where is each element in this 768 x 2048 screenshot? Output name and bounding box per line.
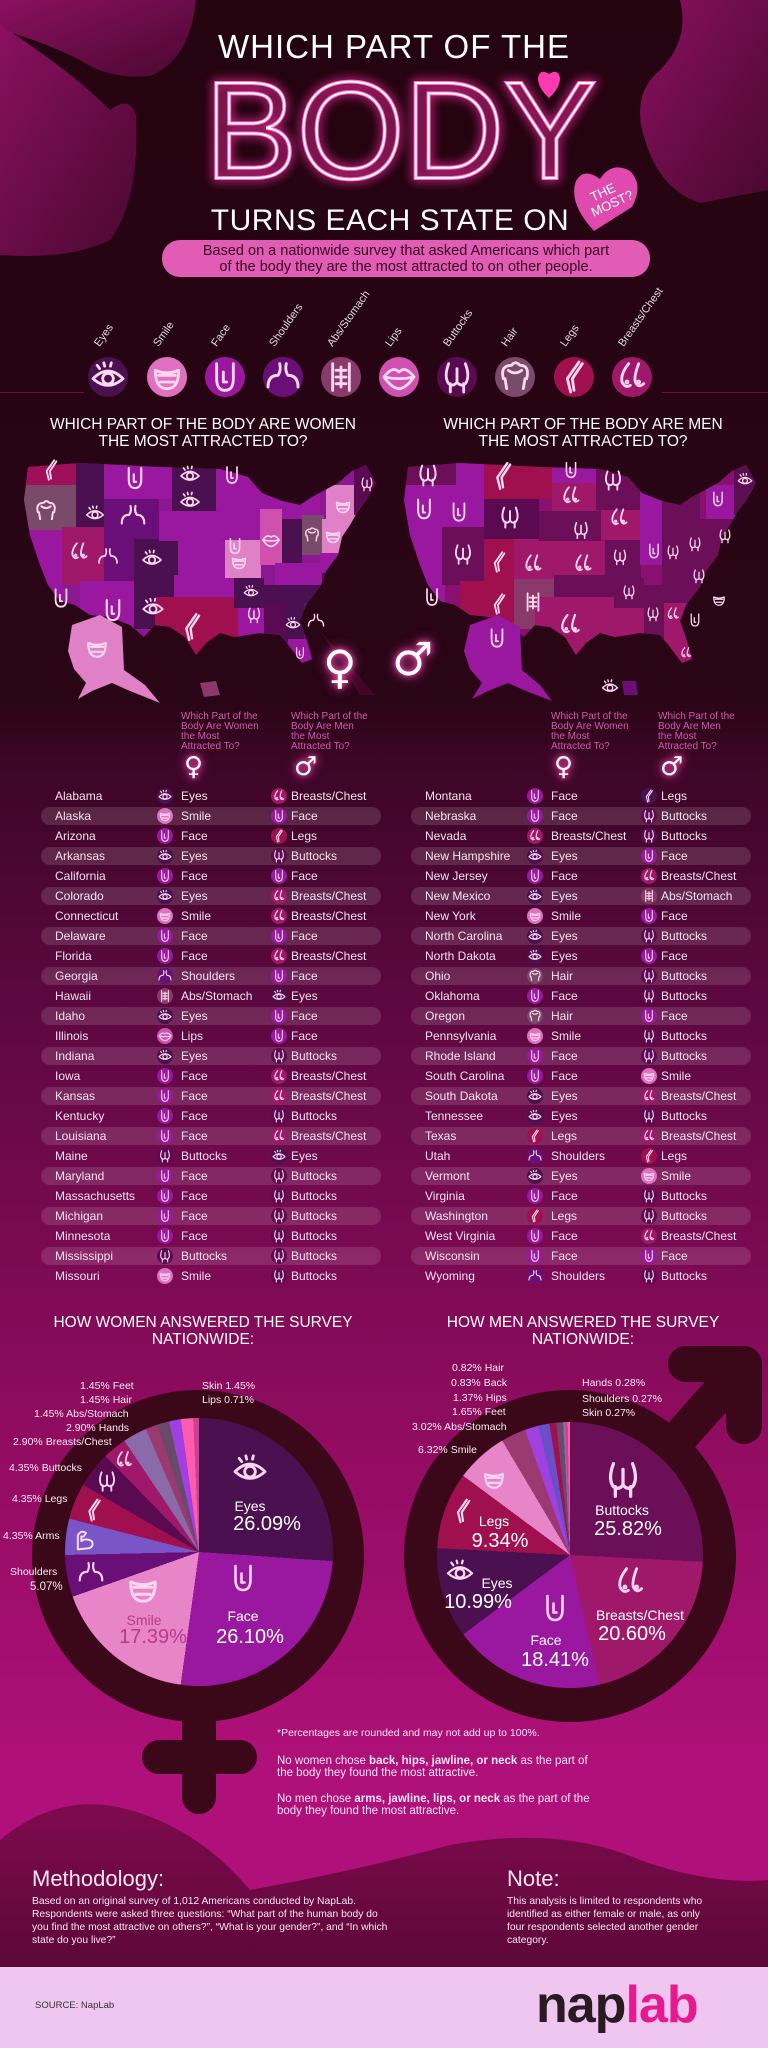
- female pie chart: [32, 1390, 364, 1814]
- table: states A-M: Face: [291, 869, 318, 883]
- table: states A-M: Face: [181, 949, 208, 963]
- table: states M-W: Utah: [425, 1149, 450, 1163]
- footnotes: *Percentages are rounded and may not add up to 100%.: [277, 1727, 540, 1739]
- symbol: female: ♀: [323, 640, 357, 694]
- table: states A-M: Eyes: [181, 789, 208, 803]
- table: states A-M: Kentucky: [55, 1109, 104, 1123]
- table: states A-M: Face: [181, 929, 208, 943]
- footnotes: the body they found the most attractive.: [277, 1767, 478, 1779]
- table: states M-W: Buttocks: [661, 1269, 707, 1283]
- table: states A-M: Eyes: [181, 1049, 208, 1063]
- table: states M-W: Buttocks: [661, 1049, 707, 1063]
- table: states M-W: Legs: [551, 1209, 577, 1223]
- female pie labels: [3, 1380, 255, 1593]
- legend: buttocks: [437, 308, 477, 397]
- table: states M-W: Vermont: [425, 1169, 470, 1183]
- table: states A-M: Eyes: [291, 989, 318, 1003]
- table: states A-M: Abs/Stomach: [181, 989, 252, 1003]
- legend: hair: Hair: [499, 326, 521, 349]
- female pie chart: Face: [227, 1608, 259, 1624]
- table: states M-W: Face: [551, 1049, 578, 1063]
- table: states A-M: Delaware: [55, 929, 106, 943]
- table: states A-M: Breasts/Chest: [291, 1089, 366, 1103]
- table: states M-W: Hair: [551, 969, 573, 983]
- table: states A-M: Face: [291, 929, 318, 943]
- table: states M-W: Face: [551, 809, 578, 823]
- table: states A-M: Minnesota: [55, 1229, 110, 1243]
- legend: breasts: [612, 286, 666, 397]
- table: states M-W: Face: [551, 869, 578, 883]
- legend: lips: Lips: [383, 326, 405, 349]
- table: states M-W: Oregon: [425, 1009, 465, 1023]
- female pie labels: 4.35% Arms: [3, 1530, 60, 1542]
- table: states A-M: Buttocks: [291, 1109, 337, 1123]
- male pie chart: 9.34%: [472, 1530, 528, 1552]
- female pie labels: Skin 1.45%: [202, 1380, 255, 1392]
- table: states A-M: Breasts/Chest: [291, 789, 366, 803]
- male pie labels: 1.37% Hips: [453, 1392, 507, 1404]
- heart: the most: THE: [588, 180, 618, 204]
- table: states A-M: Connecticut: [55, 909, 118, 923]
- pie icons: [446, 1462, 644, 1622]
- table: states M-W: New York: [425, 909, 476, 923]
- table: states M-W: Buttocks: [661, 1109, 707, 1123]
- table: states A-M: Eyes: [181, 1009, 208, 1023]
- table: states A-M: Iowa: [55, 1069, 80, 1083]
- table: states A-M: Michigan: [55, 1209, 103, 1223]
- female pie chart: 26.10%: [216, 1626, 284, 1648]
- table: states A-M: Face: [181, 1189, 208, 1203]
- table headers: Which Part of the: [181, 711, 258, 722]
- table: states M-W: Face: [661, 949, 688, 963]
- heading: women pie: NATIONWIDE:: [152, 1331, 254, 1348]
- table headers: Body Are Men: [658, 721, 721, 732]
- male pie chart: Legs: [479, 1513, 509, 1529]
- subtitle pill: [162, 240, 650, 277]
- table: states M-W: South Carolina: [425, 1069, 504, 1083]
- table headers: Attracted To?: [291, 741, 350, 752]
- methodology: Methodology:: [32, 1866, 164, 1891]
- table: states M-W: Eyes: [551, 1089, 578, 1103]
- male pie chart: Face: [530, 1632, 562, 1648]
- table: states A-M: Florida: [55, 949, 92, 963]
- table: states M-W: Smile: [661, 1169, 691, 1183]
- map: men: [404, 462, 756, 701]
- legend: abs: Abs/Stomach: [325, 289, 373, 349]
- legend: smile: [147, 320, 187, 397]
- table: states M-W: Face: [551, 1249, 578, 1263]
- table: states M-W: New Hampshire: [425, 849, 510, 863]
- table headers: the Most: [658, 731, 696, 742]
- table: states A-M: Buttocks: [291, 1209, 337, 1223]
- female pie chart: 26.09%: [233, 1513, 301, 1535]
- male symbol ring and arrow: [668, 1346, 762, 1447]
- legend: hair: [495, 326, 535, 397]
- table headers: ♂: [294, 752, 317, 782]
- table: states M-W: Rhode Island: [425, 1049, 496, 1063]
- male pie labels: [412, 1362, 662, 1456]
- table: states A-M: Eyes: [181, 849, 208, 863]
- note: This analysis is limited to respondents who: [507, 1896, 702, 1907]
- legend: shoulders: Shoulders: [267, 302, 305, 349]
- table: states M-W: New Mexico: [425, 889, 490, 903]
- legend: buttocks: Buttocks: [441, 308, 475, 349]
- legend: smile: Smile: [151, 320, 177, 349]
- table: states A-M: Eyes: [291, 1149, 318, 1163]
- note: category.: [507, 1935, 549, 1946]
- table headers: Which Part of the: [658, 711, 735, 722]
- table: states M-W: Eyes: [551, 929, 578, 943]
- table: states A-M: Breasts/Chest: [291, 949, 366, 963]
- table: states M-W: Buttocks: [661, 969, 707, 983]
- table: states A-M: Breasts/Chest: [291, 1069, 366, 1083]
- table: states A-M: Illinois: [55, 1029, 88, 1043]
- subtitle pill: of the body they are the most attracted to on other people.: [219, 259, 593, 275]
- table: states M-W: Buttocks: [661, 829, 707, 843]
- table: states M-W: Shoulders: [551, 1149, 605, 1163]
- table: states A-M: Missouri: [55, 1269, 100, 1283]
- heading: women map: [50, 416, 356, 450]
- table headers: the Most: [291, 731, 329, 742]
- table: states M-W: Legs: [661, 1149, 687, 1163]
- table: states A-M: Breasts/Chest: [291, 1129, 366, 1143]
- heading: men map: THE MOST ATTRACTED TO?: [478, 433, 688, 450]
- map icons: women: [37, 460, 372, 658]
- table: states M-W: Face: [661, 849, 688, 863]
- table: states A-M: Face: [181, 1069, 208, 1083]
- pie icons: [76, 1451, 266, 1603]
- source: SOURCE: NapLab: [35, 2000, 114, 2011]
- table: states M-W: Montana: [425, 789, 472, 803]
- table: states A-M: Buttocks: [291, 1269, 337, 1283]
- table: states A-M: Georgia: [55, 969, 98, 983]
- table: states A-M: Face: [181, 1089, 208, 1103]
- table: states A-M: Mississippi: [55, 1249, 113, 1263]
- table: states M-W: Legs: [551, 1129, 577, 1143]
- footnotes: [277, 1727, 590, 1817]
- legend: legs: [554, 323, 594, 397]
- table: states A-M: Buttocks: [181, 1149, 227, 1163]
- table: states A-M: Kansas: [55, 1089, 95, 1103]
- table: states M-W: Face: [661, 1009, 688, 1023]
- table headers: Body Are Women: [181, 721, 259, 732]
- table: states M-W: Smile: [661, 1069, 691, 1083]
- table headers: the Most: [181, 731, 219, 742]
- title: TURNS EACH STATE ON: [211, 204, 569, 237]
- table headers: ♀: [554, 752, 573, 782]
- table: states M-W: Abs/Stomach: [661, 889, 732, 903]
- table: states A-M: Buttocks: [291, 1229, 337, 1243]
- male pie chart: 20.60%: [598, 1623, 666, 1645]
- table: states A-M: Indiana: [55, 1049, 94, 1063]
- table: states A-M: Buttocks: [291, 1049, 337, 1063]
- table: states A-M: Face: [291, 969, 318, 983]
- note: [507, 1866, 702, 1946]
- footer: [0, 1967, 768, 2048]
- table: states M-W: West Virginia: [425, 1229, 495, 1243]
- table: states A-M: Maine: [55, 1149, 88, 1163]
- table: states A-M: [41, 788, 381, 1284]
- table: states M-W: Legs: [661, 789, 687, 803]
- table: states M-W: Buttocks: [661, 1209, 707, 1223]
- female pie chart: 17.39%: [119, 1626, 187, 1648]
- legend: shoulders: [263, 302, 305, 397]
- table headers: Attracted To?: [551, 741, 610, 752]
- table: states A-M: Face: [181, 1229, 208, 1243]
- male pie chart: 18.41%: [521, 1649, 589, 1671]
- methodology: you find the most attractive on others?”, “What is your gender?”, and “In which: [32, 1922, 387, 1933]
- map icons: men: [418, 463, 752, 657]
- table: states M-W: Wyoming: [425, 1269, 475, 1283]
- table headers: Which Part of the: [551, 711, 628, 722]
- female pie labels: 4.35% Buttocks: [9, 1462, 82, 1474]
- male pie labels: 0.83% Back: [451, 1377, 507, 1389]
- legend: eyes: Eyes: [92, 322, 116, 349]
- heading: women pie: HOW WOMEN ANSWERED THE SURVEY: [53, 1314, 353, 1331]
- male pie labels: 1.65% Feet: [452, 1406, 506, 1418]
- pie: [437, 1422, 703, 1688]
- table: states M-W: Breasts/Chest: [661, 1089, 736, 1103]
- table: states A-M: Massachusetts: [55, 1189, 135, 1203]
- title: [205, 28, 604, 237]
- table: states A-M: Buttocks: [291, 1189, 337, 1203]
- table: states A-M: California: [55, 869, 106, 883]
- table: states A-M: Colorado: [55, 889, 104, 903]
- table: states M-W: Wisconsin: [425, 1249, 480, 1263]
- table: states M-W: Eyes: [551, 849, 578, 863]
- heading: men map: WHICH PART OF THE BODY ARE MEN: [443, 416, 723, 433]
- note: four respondents selected another gender: [507, 1922, 698, 1933]
- legend: abs: [321, 289, 373, 397]
- table: states M-W: Face: [551, 989, 578, 1003]
- table: states M-W: Oklahoma: [425, 989, 480, 1003]
- table: states A-M: Idaho: [55, 1009, 85, 1023]
- methodology: Based on an original survey of 1,012 Americans conducted by NapLab.: [32, 1896, 356, 1907]
- table: states M-W: Eyes: [551, 1109, 578, 1123]
- table: states M-W: Virginia: [425, 1189, 465, 1203]
- table headers: Attracted To?: [658, 741, 717, 752]
- table: states M-W: Smile: [551, 909, 581, 923]
- table: states A-M: Hawaii: [55, 989, 91, 1003]
- table: states M-W: Face: [661, 909, 688, 923]
- heading: women pie: [53, 1314, 353, 1348]
- table: states M-W: Eyes: [551, 949, 578, 963]
- table: states M-W: Shoulders: [551, 1269, 605, 1283]
- male pie chart: 10.99%: [444, 1591, 512, 1613]
- table: states A-M: Face: [181, 1169, 208, 1183]
- legend icons row: [0, 286, 768, 397]
- female symbol ring and cross: [182, 1710, 216, 1814]
- table: states A-M: Breasts/Chest: [291, 889, 366, 903]
- table: states M-W: Breasts/Chest: [661, 1229, 736, 1243]
- note: Note:: [507, 1866, 560, 1891]
- footnotes: No men chose arms, jawline, lips, or neck as the part of the: [277, 1793, 590, 1805]
- table: states M-W: Face: [551, 1189, 578, 1203]
- table: states M-W: Nebraska: [425, 809, 476, 823]
- heading: women map: WHICH PART OF THE BODY ARE WOMEN: [50, 416, 356, 433]
- table: states A-M: Smile: [181, 1269, 211, 1283]
- footnotes: No women chose back, hips, jawline, or neck as the part of: [277, 1755, 588, 1767]
- table: states A-M: Legs: [291, 829, 317, 843]
- table: states A-M: Face: [181, 1109, 208, 1123]
- heading: women map: THE MOST ATTRACTED TO?: [98, 433, 308, 450]
- table: states M-W: Buttocks: [661, 929, 707, 943]
- table: states A-M: Face: [181, 1209, 208, 1223]
- table: states M-W: Eyes: [551, 889, 578, 903]
- table: states M-W: Breasts/Chest: [661, 869, 736, 883]
- methodology: Respondents were asked three questions: “What part of the human body do: [32, 1909, 378, 1920]
- table: states M-W: Breasts/Chest: [551, 829, 626, 843]
- methodology: state do you live?”: [32, 1935, 116, 1946]
- table headers: Attracted To?: [181, 741, 240, 752]
- table: states A-M: Maryland: [55, 1169, 104, 1183]
- table: states M-W: Buttocks: [661, 1029, 707, 1043]
- bottom wave background: [0, 1804, 768, 1967]
- table: states M-W: Hair: [551, 1009, 573, 1023]
- table: states M-W: Pennsylvania: [425, 1029, 496, 1043]
- female pie labels: 2.90% Breasts/Chest: [13, 1436, 112, 1448]
- female pie labels: 4.35% Legs: [12, 1493, 67, 1505]
- male pie chart: Eyes: [481, 1575, 513, 1591]
- footnotes: body they found the most attractive.: [277, 1805, 459, 1817]
- table: states M-W: Buttocks: [661, 989, 707, 1003]
- table: states M-W: South Dakota: [425, 1089, 498, 1103]
- table: states M-W: Face: [551, 789, 578, 803]
- table: states M-W: North Dakota: [425, 949, 496, 963]
- table: states A-M: Alabama: [55, 789, 102, 803]
- male pie labels: 3.02% Abs/Stomach: [412, 1421, 507, 1433]
- table: states M-W: Face: [661, 1249, 688, 1263]
- table: states A-M: Shoulders: [181, 969, 235, 983]
- table: states M-W: Ohio: [425, 969, 450, 983]
- female pie labels: 2.90% Hands: [66, 1422, 129, 1434]
- table: states M-W: Eyes: [551, 1169, 578, 1183]
- pie: [65, 1418, 333, 1686]
- legend: lips: [379, 326, 419, 397]
- table: states A-M: Face: [181, 1129, 208, 1143]
- table: states A-M: Arkansas: [55, 849, 105, 863]
- table headers: ♀: [184, 752, 203, 782]
- female pie chart: Eyes: [234, 1498, 266, 1514]
- table headers: the Most: [551, 731, 589, 742]
- table: states M-W: Tennessee: [425, 1109, 483, 1123]
- table: states M-W: Buttocks: [661, 1189, 707, 1203]
- female pie chart: Smile: [126, 1612, 162, 1628]
- male pie chart: [404, 1346, 762, 1722]
- methodology: [32, 1866, 387, 1946]
- table: states M-W: New Jersey: [425, 869, 488, 883]
- alaska & hawaii: [68, 615, 160, 703]
- male pie labels: Hands 0.28%: [582, 1377, 645, 1389]
- legend: eyes: [88, 322, 128, 397]
- table: states A-M: Alaska: [55, 809, 91, 823]
- male pie labels: 0.82% Hair: [452, 1362, 504, 1374]
- table: states M-W: Face: [551, 1069, 578, 1083]
- table: states A-M: Buttocks: [181, 1249, 227, 1263]
- table: states A-M: Face: [181, 829, 208, 843]
- table: states A-M: Face: [291, 809, 318, 823]
- subtitle pill: Based on a nationwide survey that asked Americans which part: [203, 243, 609, 259]
- female pie labels: 5.07%: [30, 1581, 63, 1593]
- symbol: male: ♂: [392, 632, 433, 686]
- heading: men pie: HOW MEN ANSWERED THE SURVEY: [447, 1314, 719, 1331]
- female pie labels: Lips 0.71%: [202, 1394, 254, 1406]
- table: states A-M: Eyes: [181, 889, 208, 903]
- male pie labels: Shoulders 0.27%: [582, 1393, 662, 1405]
- table: states M-W: Nevada: [425, 829, 466, 843]
- female pie labels: Shoulders: [10, 1566, 57, 1578]
- table: states A-M: Face: [291, 1009, 318, 1023]
- table headers: [180, 711, 735, 784]
- male pie labels: 6.32% Smile: [418, 1444, 477, 1456]
- table: states M-W: Face: [551, 1229, 578, 1243]
- table: states A-M: Arizona: [55, 829, 96, 843]
- table: states A-M: Buttocks: [291, 849, 337, 863]
- table headers: Which Part of the: [291, 711, 368, 722]
- table: states A-M: Louisiana: [55, 1129, 106, 1143]
- male pie chart: Buttocks: [595, 1502, 649, 1518]
- table: states A-M: Face: [181, 869, 208, 883]
- table: states M-W: Breasts/Chest: [661, 1129, 736, 1143]
- legend: face: Face: [209, 322, 233, 349]
- table: states A-M: Smile: [181, 909, 211, 923]
- male pie chart: 25.82%: [594, 1518, 662, 1540]
- female pie labels: 1.45% Feet: [80, 1380, 134, 1392]
- heading: men map: [443, 416, 723, 450]
- legend: face: [205, 322, 245, 397]
- legend: legs: Legs: [558, 323, 582, 349]
- female pie labels: 1.45% Hair: [80, 1394, 132, 1406]
- map: women: [24, 459, 376, 703]
- table: states A-M: Buttocks: [291, 1249, 337, 1263]
- male pie labels: Skin 0.27%: [582, 1407, 635, 1419]
- table: states M-W: Buttocks: [661, 809, 707, 823]
- table: states A-M: Breasts/Chest: [291, 909, 366, 923]
- note: identified as either female or male, as only: [507, 1909, 700, 1920]
- legend: breasts: Breasts/Chest: [616, 286, 666, 349]
- heading: men pie: NATIONWIDE:: [532, 1331, 634, 1348]
- female pie labels: 1.45% Abs/Stomach: [34, 1408, 129, 1420]
- logo: naplab: naplab: [536, 1976, 698, 2034]
- table: states M-W: North Carolina: [425, 929, 502, 943]
- decorative blobs: [0, 0, 768, 256]
- heart: the most: MOST?: [589, 187, 635, 220]
- table headers: Body Are Women: [551, 721, 629, 732]
- table: states M-W: [411, 788, 751, 1284]
- table headers: Body Are Men: [291, 721, 354, 732]
- table: states A-M: Lips: [181, 1029, 203, 1043]
- heart: the most: [574, 167, 638, 231]
- title: WHICH PART OF THE: [218, 28, 570, 65]
- male pie chart: Breasts/Chest: [596, 1607, 684, 1623]
- table: states M-W: Washington: [425, 1209, 488, 1223]
- table: states A-M: Face: [291, 1029, 318, 1043]
- table: states A-M: Smile: [181, 809, 211, 823]
- table: states M-W: Texas: [425, 1129, 456, 1143]
- table headers: ♂: [660, 752, 683, 782]
- table: states M-W: Smile: [551, 1029, 581, 1043]
- heading: men pie: [447, 1314, 719, 1348]
- table: states A-M: Buttocks: [291, 1169, 337, 1183]
